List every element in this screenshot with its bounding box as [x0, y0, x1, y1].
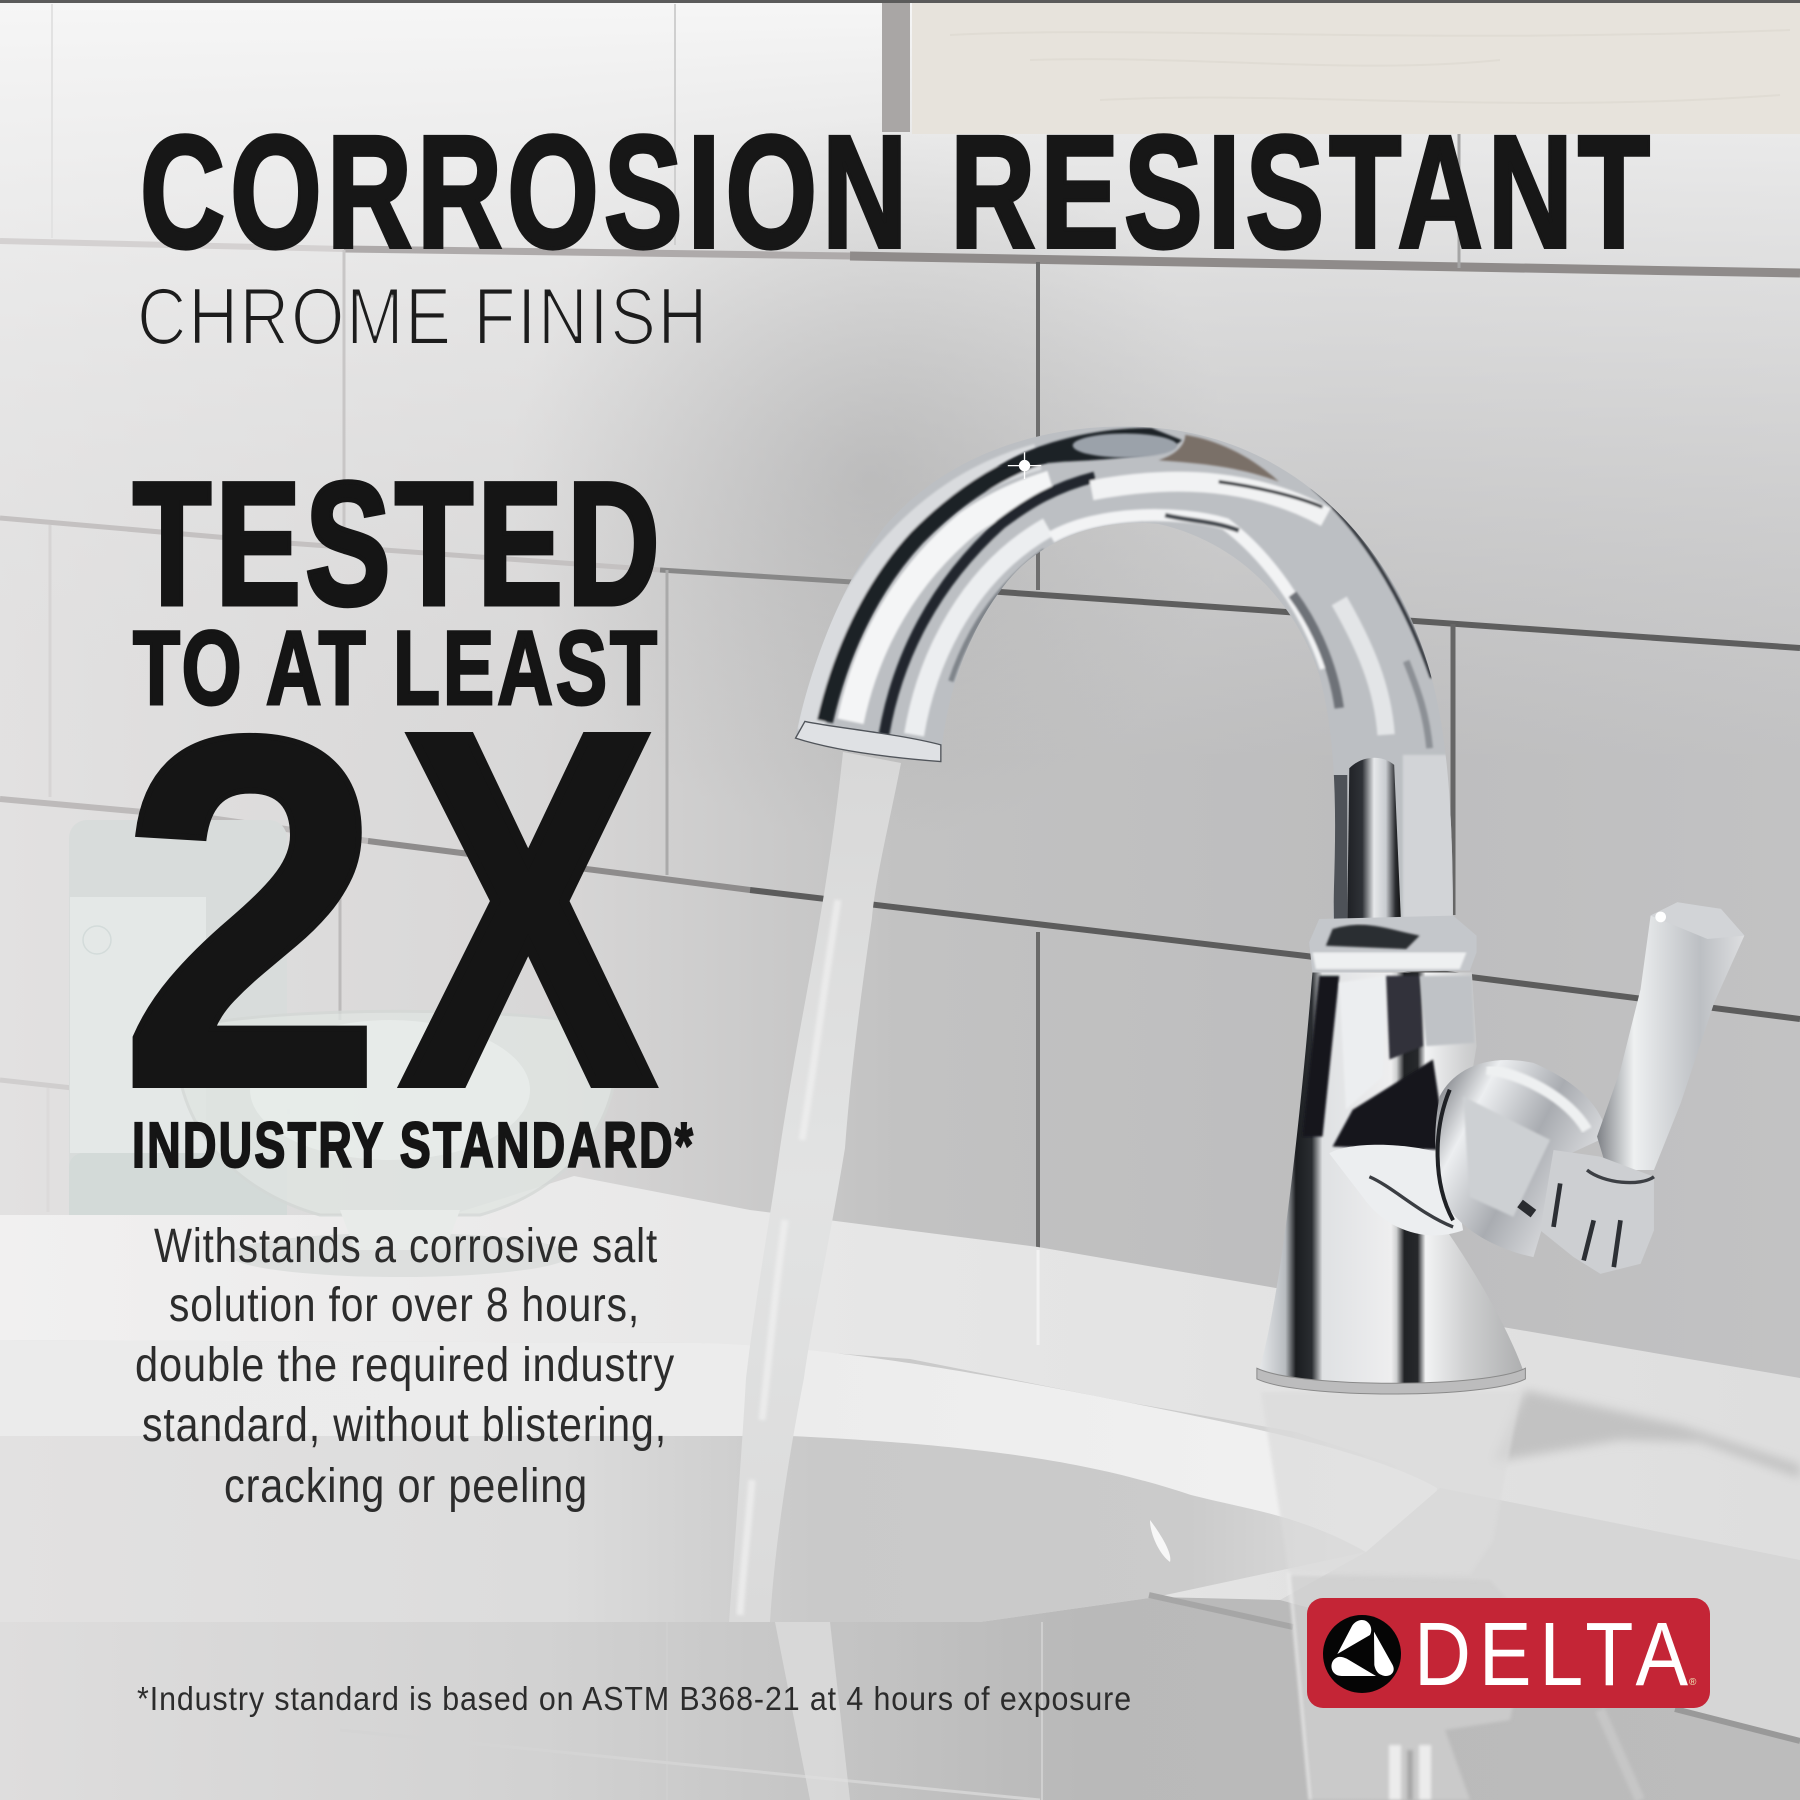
- footnote: *Industry standard is based on ASTM B368-21 at 4 hours of exposure: [137, 1680, 1132, 1717]
- body text: cracking or peeling: [224, 1460, 588, 1513]
- reflective lower zone: [0, 1390, 1800, 1800]
- top wood panel: [0, 0, 1800, 134]
- claim figure: 2X: 2: [119, 632, 383, 1191]
- faucet spout: [790, 420, 1460, 936]
- body text: solution for over 8 hours,: [169, 1279, 640, 1332]
- Delta logo: ®: [1689, 1677, 1697, 1688]
- faucet aerator: [796, 721, 941, 762]
- subtitle: CHROME FINISH: [137, 272, 709, 362]
- wall tile grout lines: [0, 4, 1800, 1250]
- claim figure: 2X: X: [402, 629, 656, 1188]
- claim line: to at least: TO AT LEAST: [133, 610, 660, 727]
- claim line: tested: TESTED: [133, 447, 664, 642]
- glass jar: [176, 1011, 618, 1277]
- faucet reflection: [1261, 1392, 1640, 1800]
- faucet body: [1257, 973, 1525, 1394]
- faucet collar: [1309, 916, 1477, 973]
- body text: Withstands a corrosive salt: [154, 1220, 658, 1273]
- body text: double the required industry: [135, 1339, 675, 1392]
- countertop: [0, 1176, 1800, 1800]
- sink: [0, 1250, 1437, 1622]
- faucet: [790, 420, 1744, 1394]
- water stream: [729, 752, 901, 1800]
- soap bottle: [69, 820, 287, 1250]
- claim: tested to at least 2X: [119, 447, 695, 1191]
- claim line: industry standard: INDUSTRY STANDARD*: [132, 1109, 695, 1181]
- Delta logo: DELTA: [1414, 1605, 1696, 1705]
- faucet hub: [1435, 1060, 1607, 1257]
- Delta logo: [1307, 1598, 1710, 1708]
- spout sparkle: [1008, 452, 1041, 479]
- body text: [135, 1220, 675, 1513]
- faucet lever handle: [1540, 902, 1744, 1274]
- body text: standard, without blistering,: [142, 1399, 667, 1452]
- claim figure: 2X: [119, 629, 656, 1191]
